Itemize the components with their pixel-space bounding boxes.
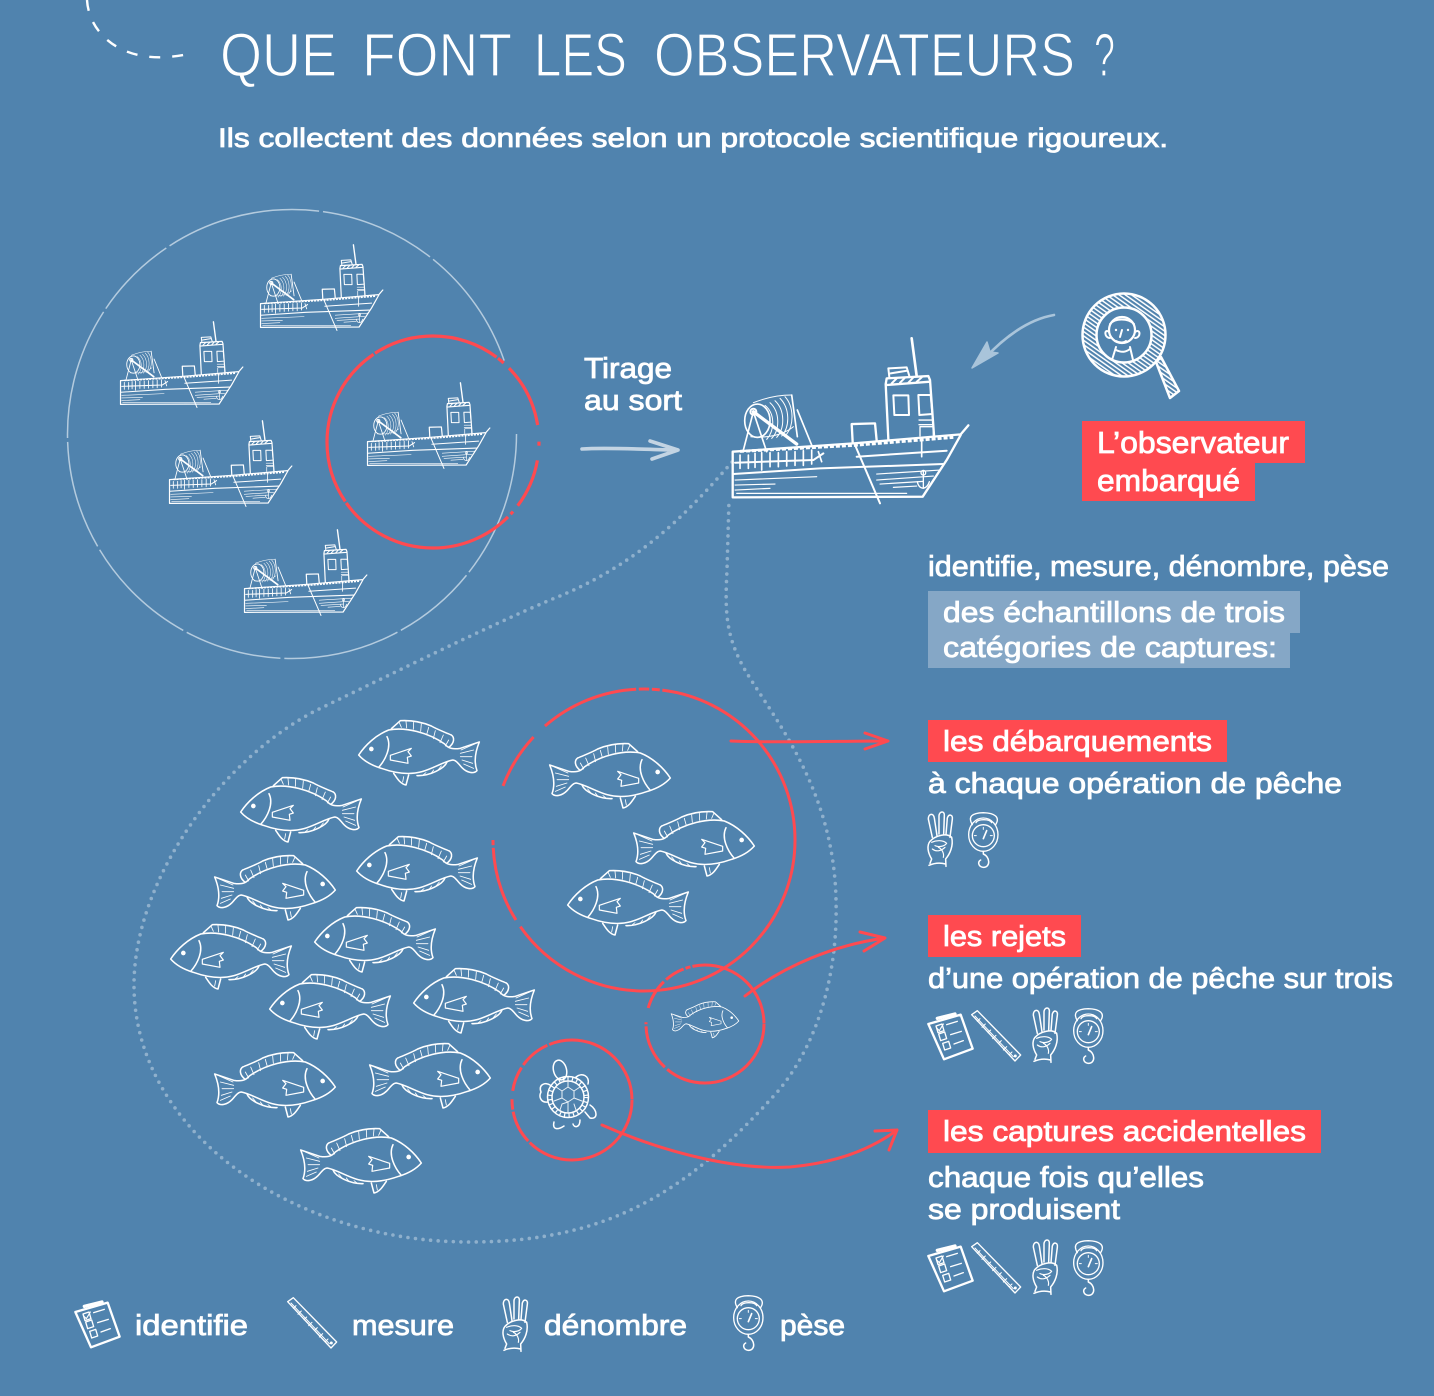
- legend item: identifie: identifie: [135, 1310, 248, 1342]
- legend item: dénombre: dénombre: [544, 1310, 687, 1342]
- fleet circle: [68, 210, 516, 658]
- panel: landed fish in red circle: [493, 689, 795, 991]
- large boat: [733, 338, 968, 503]
- arrow: tirage to boat: [582, 441, 678, 459]
- label: les débarquements: les débarquements: [943, 726, 1212, 758]
- block: les débarquements: [928, 720, 1342, 867]
- text: fréquence captures: [928, 1162, 1204, 1226]
- text: fréquence rejets: d’une opération de pêche sur trois: [928, 963, 1393, 995]
- callout: trois catégories: [928, 591, 1300, 668]
- legend item: mesure: mesure: [352, 1310, 454, 1342]
- text: fréquence captures: se produisent: [928, 1194, 1120, 1226]
- boats: [121, 245, 490, 615]
- legend item: dénombre: [503, 1297, 687, 1351]
- title: ?: [1094, 21, 1115, 89]
- decorative dashed arc: [87, 0, 188, 57]
- icon: magnifier with observer: [1082, 294, 1179, 398]
- text: fréquence débarquements: à chaque opération de pêche: [928, 768, 1342, 800]
- callout: trois catégories: des échantillons de trois: [943, 597, 1285, 629]
- arrow: discards to rejets: [745, 932, 885, 996]
- label: les captures accidentelles: [928, 1110, 1321, 1153]
- legend item: mesure: [288, 1298, 454, 1348]
- block: les captures accidentelles: [928, 1110, 1321, 1295]
- red selection circle: [327, 336, 539, 548]
- subtitle: Ils collectent des données selon un protocole scientifique rigoureux.: [218, 123, 1168, 153]
- legend item: identifie: [75, 1302, 248, 1347]
- title: [220, 21, 1115, 89]
- label: les captures accidentelles: les captures accidentelles: [943, 1116, 1306, 1148]
- label: les rejets: les rejets: [943, 921, 1066, 953]
- label: tirage au sort: au sort: [584, 385, 682, 417]
- icons: identifie, mesure, dénombre, pèse: [928, 1008, 1103, 1063]
- label: les rejets: [928, 915, 1081, 957]
- callout: trois catégories: catégories de captures:: [943, 632, 1277, 664]
- arrow: observer to boat: [972, 315, 1054, 368]
- title: OBSERVATEURS: [654, 21, 1075, 89]
- title: FONT: [362, 21, 512, 89]
- text: fréquence captures: chaque fois qu’elles: [928, 1162, 1204, 1194]
- title: QUE: [220, 21, 337, 89]
- arrow: landed to débarquements: [731, 733, 888, 749]
- panel: school of fish: [171, 721, 534, 1193]
- dotted zoom outline linking boat to catch: [134, 462, 836, 1242]
- label: tirage au sort: [584, 353, 682, 417]
- icon: turtle: [540, 1059, 596, 1129]
- label: les débarquements: [928, 720, 1227, 762]
- callout: l'observateur embarqué: L’observateur: [1097, 425, 1289, 460]
- panel: discarded fish in red circle: [646, 965, 764, 1083]
- text: actions of the observer: identifie, mesure, dénombre, pèse: [928, 551, 1389, 583]
- callout: l'observateur embarqué: [1082, 421, 1305, 501]
- legend item: pèse: pèse: [780, 1310, 845, 1342]
- panel: fleet of boats: [68, 210, 539, 658]
- icons: identifie, mesure, dénombre, pèse: [928, 1240, 1103, 1295]
- arrow: turtle to captures accidentelles: [602, 1125, 897, 1167]
- block: les rejets: [928, 915, 1393, 1063]
- label: tirage au sort: Tirage: [584, 353, 672, 385]
- title: LES: [534, 21, 627, 89]
- legend: [75, 1296, 845, 1351]
- icons: dénombre, pèse: [928, 812, 998, 867]
- callout: l'observateur embarqué: embarqué: [1097, 463, 1240, 498]
- panel: turtle in red circle: [512, 1040, 632, 1160]
- legend item: pèse: [734, 1296, 845, 1350]
